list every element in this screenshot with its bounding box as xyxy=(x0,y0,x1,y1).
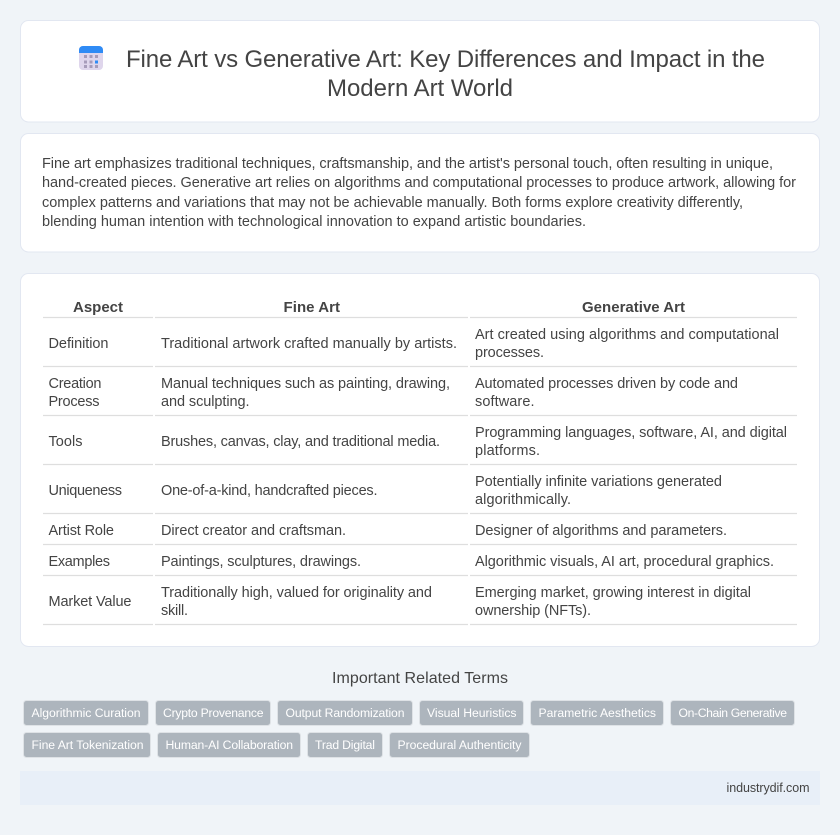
row: definition xyxy=(48,327,779,361)
heading: related terms: Important Related Terms xyxy=(332,670,508,687)
row: creation process: software. xyxy=(475,394,534,410)
panel: comparison table xyxy=(20,274,820,646)
related term tags xyxy=(24,700,794,758)
row: creation process xyxy=(48,376,738,410)
table header row: Aspect xyxy=(73,299,123,316)
tag: visual heuristics: Visual Heuristics xyxy=(427,706,516,720)
tag: parametric aesthetics: Parametric Aesthetics xyxy=(538,706,656,720)
row: market value: Emerging market, growing interest in digital xyxy=(475,585,751,601)
tag: on-chain generative: On-Chain Generative xyxy=(678,706,787,720)
row: creation process: Manual techniques such as painting, drawing, xyxy=(161,376,450,392)
tag: fine art tokenization xyxy=(24,732,150,758)
row: market value: ownership (NFTs). xyxy=(475,603,591,619)
tag: output randomization xyxy=(278,700,412,726)
row: artist role: Direct creator and craftsman. xyxy=(161,523,346,539)
row: creation process: Process xyxy=(48,394,100,410)
row: examples xyxy=(48,554,774,570)
table header row: Fine Art xyxy=(284,299,340,316)
row: tools xyxy=(48,425,787,459)
row: market value: Market Value xyxy=(48,594,132,610)
table header row xyxy=(73,299,685,316)
title: Fine Art vs Generative Art: Key Differences and Impact in the xyxy=(126,46,765,73)
row: uniqueness: Potentially infinite variations generated xyxy=(475,474,722,490)
row: uniqueness: Uniqueness xyxy=(48,483,122,499)
panel: header xyxy=(20,20,820,122)
tag: visual heuristics xyxy=(420,700,524,726)
icon: calendar xyxy=(79,46,103,70)
row: market value: Traditionally high, valued for originality and xyxy=(161,585,432,601)
row: examples: Paintings, sculptures, drawings. xyxy=(161,554,361,570)
tag: crypto provenance xyxy=(156,700,270,726)
tag: algorithmic curation: Algorithmic Curation xyxy=(32,706,140,720)
row: creation process: Creation xyxy=(48,376,102,392)
row: definition: Traditional artwork crafted manually by artists. xyxy=(161,336,457,352)
row: artist role xyxy=(48,523,727,539)
row: market value: skill. xyxy=(161,603,188,619)
intro paragraph: blending human intention with technological innovation to expand artistic boundaries. xyxy=(42,214,586,230)
row: creation process: Automated processes driven by code and xyxy=(475,376,738,392)
row: definition: Definition xyxy=(48,336,108,352)
row: definition: processes. xyxy=(475,345,544,361)
title xyxy=(126,46,765,102)
tag: procedural authenticity xyxy=(390,732,530,758)
row: tools: Programming languages, software, AI, and digital xyxy=(475,425,787,441)
intro paragraph xyxy=(42,156,796,230)
tag: fine art tokenization: Fine Art Tokenization xyxy=(32,738,144,752)
tag: human-ai collaboration: Human-AI Collaboration xyxy=(166,738,293,752)
row: uniqueness: One-of-a-kind, handcrafted pieces. xyxy=(161,483,378,499)
row: market value xyxy=(48,585,751,619)
tag: output randomization: Output Randomization xyxy=(286,706,404,720)
row: tools: Tools xyxy=(48,434,82,450)
row: uniqueness: algorithmically. xyxy=(475,492,571,508)
row: artist role: Designer of algorithms and parameters. xyxy=(475,523,727,539)
tag: on-chain generative xyxy=(670,700,794,726)
row: uniqueness xyxy=(48,474,722,508)
footer: industrydif.com xyxy=(726,781,810,795)
tag: trad digital: Trad Digital xyxy=(315,738,375,752)
tag: crypto provenance: Crypto Provenance xyxy=(163,706,264,720)
row: examples: Examples xyxy=(48,554,110,570)
panel: introduction xyxy=(20,134,820,252)
intro paragraph: Fine art emphasizes traditional techniques, craftsmanship, and the artist's personal touch, often resulting in unique, xyxy=(42,156,773,172)
tag: human-ai collaboration xyxy=(158,732,300,758)
intro paragraph: complex patterns and variations that may not be achievable manually. Both forms explore creativity differently, xyxy=(42,195,743,211)
intro paragraph: hand-created pieces. Generative art relies on algorithms and computational processes to produce artwork, allowing for xyxy=(42,175,796,191)
tag: algorithmic curation xyxy=(24,700,148,726)
tag: parametric aesthetics xyxy=(530,700,664,726)
row: creation process: and sculpting. xyxy=(161,394,250,410)
title: Modern Art World xyxy=(327,75,513,102)
row: tools: platforms. xyxy=(475,443,540,459)
row: artist role: Artist Role xyxy=(48,523,114,539)
tag: trad digital xyxy=(308,732,382,758)
tag: procedural authenticity: Procedural Authenticity xyxy=(398,738,522,752)
table header row: Generative Art xyxy=(582,299,685,316)
row: definition: Art created using algorithms and computational xyxy=(475,327,779,343)
row: tools: Brushes, canvas, clay, and traditional media. xyxy=(161,434,440,450)
footer xyxy=(20,771,820,805)
row: examples: Algorithmic visuals, AI art, procedural graphics. xyxy=(475,554,774,570)
